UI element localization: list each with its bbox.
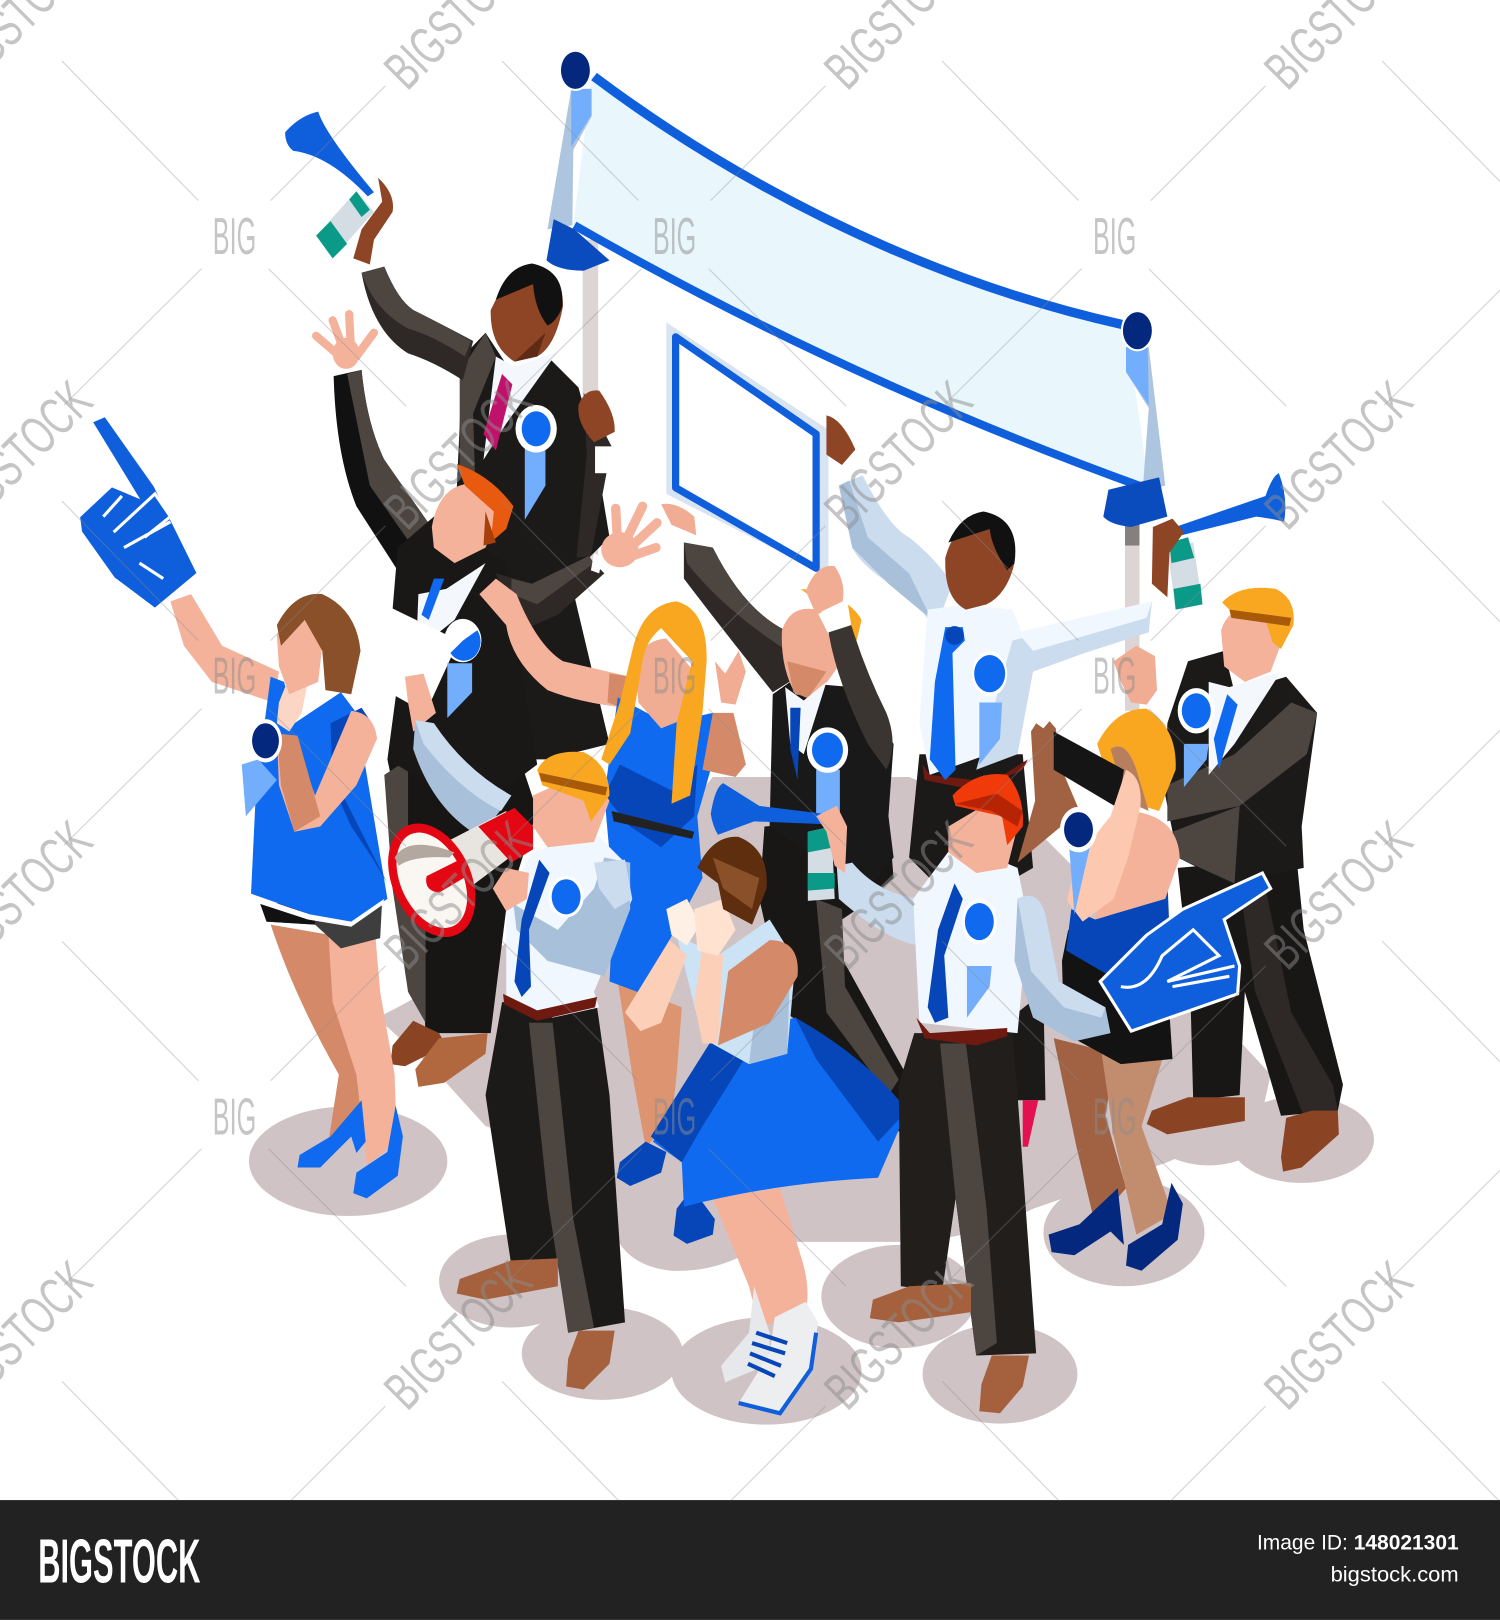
shoes — [617, 1142, 666, 1186]
footer bar — [0, 1500, 1500, 1620]
infographic canvas: BIG — [1093, 646, 1136, 704]
person: man in suit holding placard — [661, 504, 909, 1131]
hand on pole — [578, 390, 615, 442]
watermark BIGSTOCK text: BIGSTOCK — [813, 1250, 984, 1421]
shorts — [260, 899, 382, 948]
watermark BIG text: BIG — [213, 207, 256, 265]
raised arm — [1067, 770, 1141, 922]
cuff — [821, 599, 851, 632]
hand on megaphone — [493, 868, 529, 911]
vuvuzela — [1169, 473, 1285, 537]
legs — [271, 925, 364, 1142]
watermark BIG text: BIG — [653, 207, 696, 265]
body top — [1066, 878, 1169, 976]
hand with bottle — [816, 806, 847, 873]
image ID: Image ID: 148021301 — [1257, 1532, 1459, 1555]
hand — [1152, 519, 1184, 597]
front sneaker — [739, 1302, 818, 1413]
hand at placard — [661, 504, 696, 535]
left pole — [583, 240, 598, 560]
shirt cuff — [595, 446, 612, 473]
hair — [277, 594, 361, 694]
right banner flap — [1126, 347, 1165, 492]
head — [533, 770, 610, 847]
shirt — [913, 842, 1028, 1033]
person: man in white shirt with megaphone — [371, 720, 632, 1390]
tie — [514, 860, 550, 997]
right pole — [1125, 494, 1139, 711]
paper — [362, 608, 459, 713]
person: redhead man in white shirt with foam finger — [711, 774, 1271, 1413]
legs — [387, 759, 537, 1033]
watermark BIGSTOCK text: BIGSTOCK — [373, 370, 544, 540]
hands — [666, 899, 700, 945]
watermark BIGSTOCK text: BIGSTOCK — [813, 370, 984, 540]
arms — [625, 940, 687, 1031]
head — [1221, 609, 1286, 682]
collar — [483, 351, 558, 460]
right sleeve — [496, 558, 604, 630]
foam finger — [1100, 873, 1271, 1031]
rosette — [1069, 847, 1090, 914]
banner on two poles — [546, 50, 1167, 711]
belt — [503, 994, 597, 1021]
watermark BIGSTOCK text: BIGSTOCK — [373, 1250, 544, 1421]
watermark BIG text — [213, 207, 1136, 1145]
right sleeve — [829, 625, 893, 770]
placard — [666, 322, 829, 577]
dress — [251, 677, 387, 925]
top — [677, 920, 795, 1064]
tie — [930, 627, 965, 780]
face — [782, 609, 842, 697]
vuvuzela — [711, 783, 832, 835]
foam finger — [79, 415, 198, 610]
shoes — [870, 1283, 971, 1322]
watermark BIG text: BIG — [213, 646, 256, 704]
head — [635, 639, 694, 728]
watermark BIGSTOCK text: BIGSTOCK — [1253, 1250, 1424, 1421]
bottle — [1167, 542, 1202, 610]
collar and tie — [417, 563, 486, 641]
legs — [1178, 858, 1343, 1116]
hand — [353, 178, 393, 265]
head — [491, 267, 563, 362]
person: heels woman with phone — [1018, 709, 1183, 1271]
site URL: bigstock.com — [1331, 1562, 1459, 1587]
raised sleeve — [684, 542, 806, 692]
hair — [1097, 709, 1176, 811]
person: man in black suit holding pole — [285, 112, 615, 759]
shoes — [1147, 1097, 1245, 1134]
collar and tie — [785, 682, 826, 754]
skirt — [1062, 930, 1173, 1064]
skirt — [653, 1018, 907, 1207]
hand at placard — [826, 415, 855, 465]
legs — [899, 1033, 1036, 1355]
raised hand — [316, 314, 374, 369]
person: woman in blue dress with long blond hair — [479, 579, 746, 1244]
torso — [387, 517, 537, 811]
arm behind phone — [1018, 721, 1080, 863]
raised sleeve — [334, 370, 430, 579]
fist — [806, 566, 843, 615]
person: man in white shirt with pole — [826, 415, 1285, 909]
vuvuzela — [285, 112, 374, 196]
shirt — [506, 832, 632, 1018]
hair — [801, 589, 862, 646]
person: woman with foam finger at left — [79, 415, 403, 1198]
left pole cap — [559, 50, 592, 91]
left banner flap — [548, 89, 592, 229]
legs — [486, 1002, 625, 1333]
rosette — [525, 446, 545, 520]
dress — [604, 697, 718, 994]
dark behind — [981, 992, 1045, 1100]
torso — [770, 682, 894, 889]
rosette — [1184, 744, 1209, 787]
shoes — [298, 1100, 366, 1167]
shoes — [390, 1021, 446, 1066]
right pole cap — [1121, 310, 1154, 351]
shoulder and arm — [277, 711, 377, 832]
watermark BIG text: BIG — [653, 646, 696, 704]
bottle — [808, 827, 835, 901]
pants — [909, 754, 1033, 909]
shoes — [1049, 1188, 1124, 1255]
footer bar: BIGSTOCK — [38, 1528, 201, 1597]
fist — [277, 677, 307, 731]
shirt — [919, 604, 1033, 775]
phone — [1054, 731, 1124, 808]
banner cloth — [573, 74, 1149, 486]
watermark BIGSTOCK text: BIGSTOCK — [373, 810, 544, 981]
tie — [483, 374, 512, 450]
hand on paper — [405, 674, 436, 731]
far shoulder — [1095, 811, 1180, 920]
watermark BIG text: BIG — [213, 1087, 256, 1145]
shoes — [457, 1258, 558, 1300]
raised sleeve — [362, 267, 473, 380]
legs — [618, 981, 682, 1147]
outstretched arm — [479, 579, 630, 708]
rosette — [549, 876, 584, 917]
hair — [697, 837, 767, 925]
left arm — [837, 863, 919, 945]
bottle — [316, 191, 374, 258]
head — [945, 515, 1014, 610]
raised arm — [170, 594, 279, 703]
legs — [759, 816, 909, 1131]
rosette — [979, 703, 1002, 765]
head — [948, 801, 1018, 873]
rosette — [447, 663, 472, 718]
suit body — [455, 333, 610, 759]
legs — [713, 1188, 808, 1328]
watermark BIGSTOCK text: BIGSTOCK — [813, 810, 984, 981]
megaphone — [436, 811, 517, 899]
person: man in dark suit at right — [1147, 588, 1343, 1172]
ground shadows — [249, 777, 1374, 1425]
hair — [601, 601, 707, 804]
back sneaker — [721, 1286, 770, 1382]
belt — [916, 1018, 1007, 1046]
hand on pole — [1114, 646, 1157, 705]
watermark BIGSTOCK text: BIGSTOCK — [1253, 370, 1424, 540]
person: redhead man in black suit with paper — [316, 314, 657, 1087]
right arm — [1014, 896, 1111, 1041]
head — [432, 484, 501, 563]
raised sleeve — [839, 475, 952, 630]
watermark BIGSTOCK text: BIGSTOCK — [1253, 810, 1424, 981]
rosette — [816, 770, 840, 816]
open hand — [601, 506, 657, 567]
suit torso — [1165, 651, 1317, 883]
raised arm — [413, 720, 511, 837]
rosette — [967, 966, 992, 1018]
person: woman in blue skirt covering face — [625, 837, 907, 1413]
infographic canvas: BIG — [1093, 207, 1136, 265]
head — [277, 617, 322, 694]
infographic canvas: BIG — [1093, 1087, 1136, 1145]
legs — [1054, 1038, 1126, 1224]
tie — [928, 883, 963, 1023]
rosette — [242, 759, 277, 816]
watermark BIG text: BIG — [653, 1087, 696, 1145]
raised arm — [702, 713, 746, 777]
collar and tie — [1209, 672, 1281, 775]
